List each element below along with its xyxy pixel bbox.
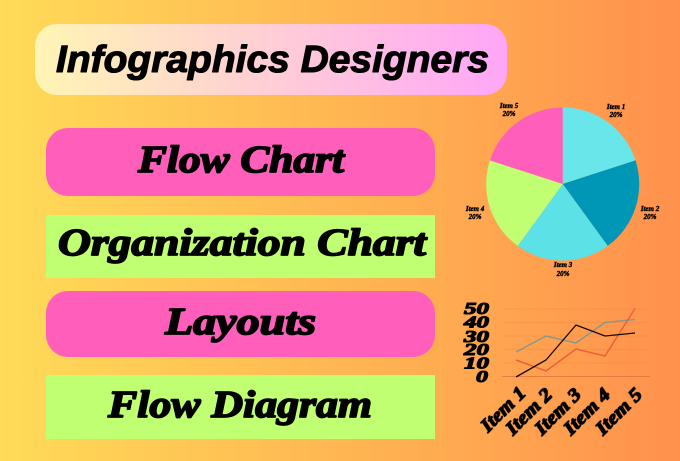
pie labels: 20%: [643, 213, 657, 221]
panel: Flow Diagram: [46, 375, 435, 439]
y-axis labels: 0: [476, 367, 489, 386]
pie labels: 20%: [609, 111, 623, 119]
title: Infographics Designers: [56, 39, 489, 81]
panel: Organization Chart: [46, 215, 435, 278]
x-axis labels: [476, 383, 647, 440]
panel: Flow Chart: Flow Chart: [137, 139, 346, 181]
y-axis labels: 10: [464, 354, 490, 372]
x-axis labels: Item 2: [501, 384, 557, 440]
pie labels: Item 2: [640, 205, 660, 213]
panel: Layouts: Layouts: [164, 301, 316, 343]
series: black: [516, 325, 635, 377]
pie labels: 20%: [502, 110, 516, 118]
y-axis labels: 20: [463, 340, 490, 359]
panel: Flow Chart: [46, 128, 435, 196]
x-axis labels: Item 1: [476, 383, 530, 437]
panel: Flow Diagram: Flow Diagram: [107, 384, 372, 426]
title banner: [35, 24, 507, 95]
x-axis labels: Item 4: [559, 384, 615, 440]
pie labels: 20%: [556, 270, 570, 278]
line chart: [463, 299, 650, 440]
panel: Organization Chart: Organization Chart: [58, 222, 428, 264]
pie labels: Item 1: [606, 103, 625, 111]
pie labels: Item 4: [465, 205, 485, 213]
y-axis labels: [463, 299, 490, 386]
x-axis labels: Item 5: [591, 384, 647, 440]
pie labels: 20%: [468, 213, 482, 221]
x-axis labels: Item 3: [530, 384, 586, 440]
y-axis labels: 30: [463, 327, 490, 346]
y-axis labels: 50: [464, 299, 490, 318]
pie chart: [465, 102, 660, 278]
pie labels: [465, 102, 660, 278]
panel: Layouts: [46, 291, 435, 357]
pie labels: Item 5: [499, 102, 519, 110]
series: grey: [516, 320, 635, 352]
pie labels: Item 3: [553, 261, 573, 269]
series: red: [516, 308, 635, 371]
y-axis labels: 40: [463, 312, 490, 332]
